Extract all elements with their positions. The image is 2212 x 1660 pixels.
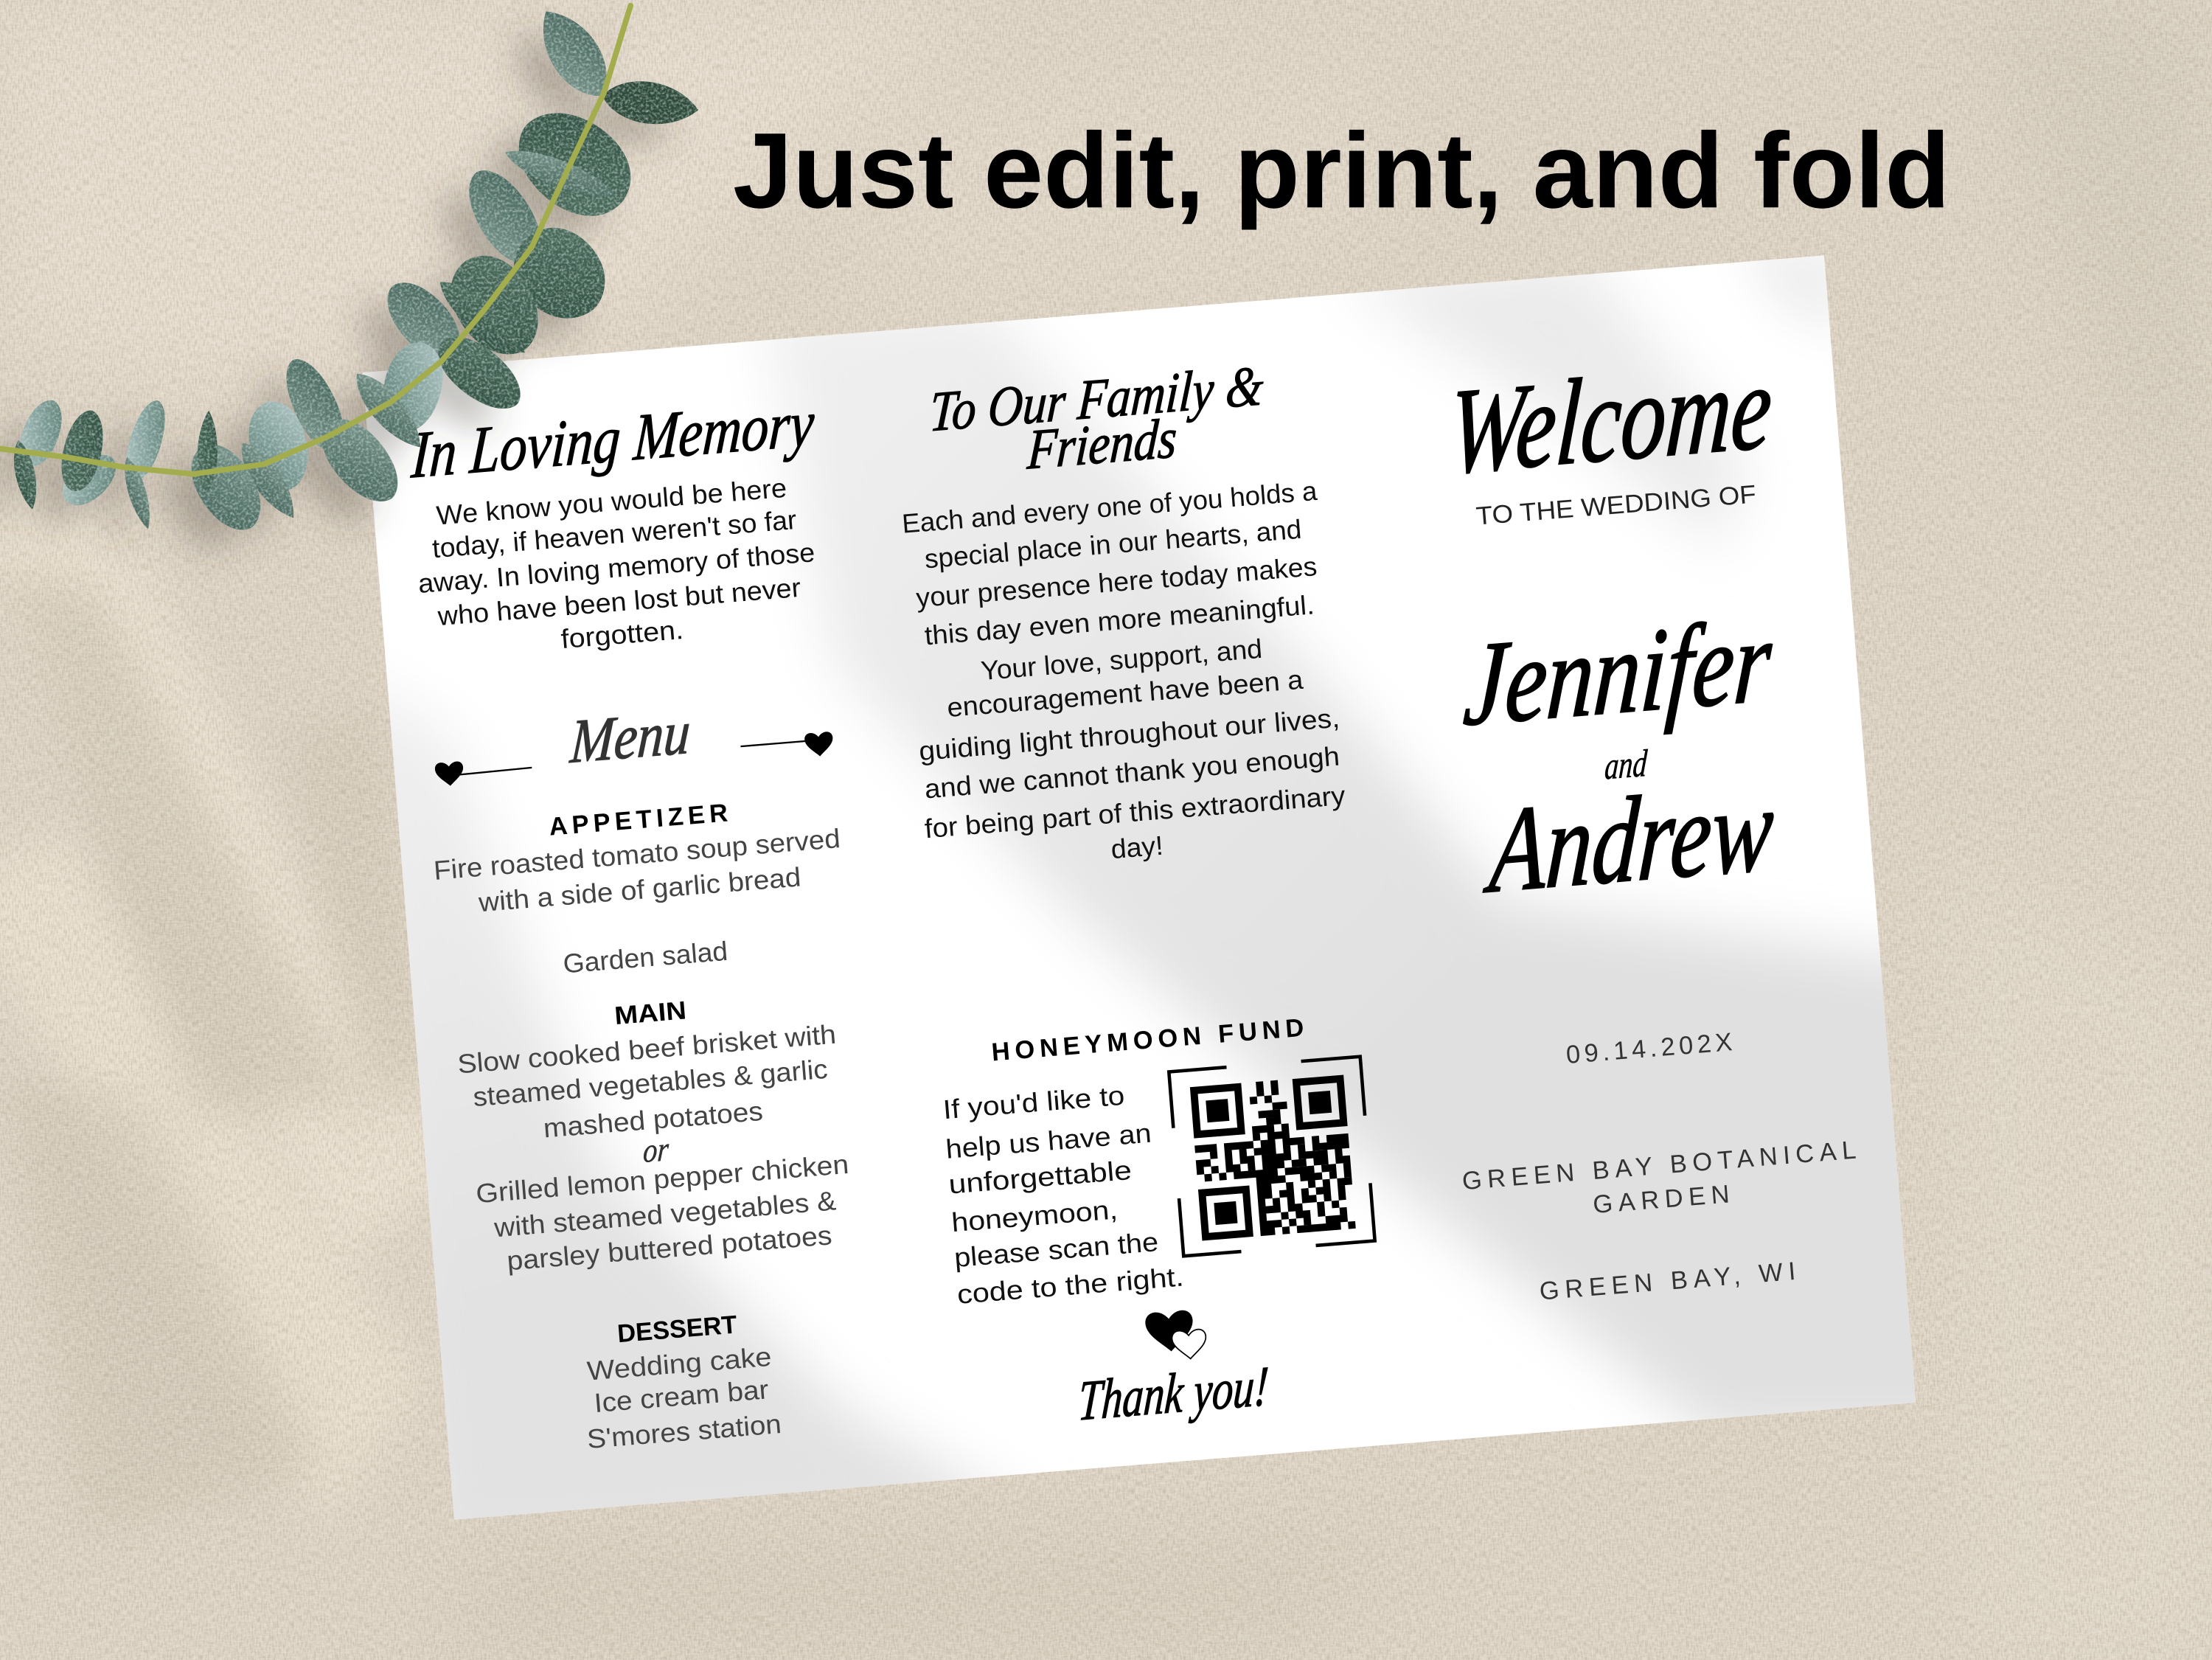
- thank-you message: special place in our hearts, and: [923, 514, 1303, 574]
- menu: appetizer: Fire roasted tomato soup served: [433, 823, 841, 886]
- couple names: Jennifer: [1461, 594, 1775, 751]
- panel: welcome cover: [1446, 338, 1857, 1306]
- couple names: Andrew: [1481, 760, 1777, 919]
- menu: dessert: Wedding cake: [586, 1341, 773, 1386]
- menu: main: mashed potatoes: [542, 1096, 764, 1143]
- menu: dessert: Ice cream bar: [593, 1374, 770, 1418]
- menu: dessert: S'mores station: [586, 1409, 782, 1454]
- menu: dessert: DESSERT: [616, 1310, 738, 1348]
- title: Just edit, print, and fold: [733, 110, 1950, 230]
- thank-you message: Your love, support, and: [980, 633, 1263, 686]
- leaves behind stem: [9, 0, 701, 542]
- menu: appetizer: APPETIZER: [548, 799, 729, 841]
- honeymoon text: unforgettable: [947, 1155, 1133, 1200]
- venue: GREEN BAY BOTANICAL: [1461, 1136, 1857, 1195]
- date: 09.14.202X: [1565, 1028, 1733, 1069]
- qr code: [1169, 1057, 1375, 1256]
- menu: main: [456, 996, 850, 1276]
- heading: menu: Menu: [568, 698, 692, 777]
- eucalyptus branch: [0, 0, 701, 542]
- honeymoon text: code to the right.: [956, 1261, 1185, 1310]
- venue: [1461, 1136, 1857, 1306]
- menu: appetizer: [433, 799, 841, 979]
- honeymoon text: [942, 1080, 1185, 1310]
- menu: appetizer: with a side of garlic bread: [477, 861, 802, 917]
- thank-you message: day!: [1110, 830, 1164, 864]
- honeymoon text: help us have an: [945, 1118, 1152, 1164]
- heading: welcome: Welcome: [1446, 338, 1775, 499]
- thank-you message: this day even more meaningful.: [923, 589, 1315, 650]
- thank-you message: encouragement have been a: [946, 664, 1304, 723]
- menu: main: Slow cooked beef brisket with: [456, 1019, 837, 1079]
- menu: main: with steamed vegetables &: [493, 1185, 837, 1243]
- heading: to our family and friends: To Our Family &: [928, 353, 1265, 443]
- thank-you message: for being part of this extraordinary: [923, 780, 1347, 844]
- menu: main: steamed vegetables & garlic: [472, 1054, 829, 1112]
- paper sheet: [363, 255, 1916, 1520]
- icon: right heart and line: [740, 732, 834, 757]
- thank-you message: Each and every one of you holds a: [901, 476, 1318, 539]
- memorial text: [417, 473, 816, 654]
- heading: to our family and friends: Friends: [1025, 406, 1179, 482]
- heading: to our family and friends: [928, 353, 1265, 482]
- icon: double hearts: [1144, 1310, 1208, 1360]
- menu: main: MAIN: [613, 996, 687, 1030]
- thank-you message: [901, 476, 1347, 864]
- thank you: Thank you!: [1077, 1354, 1270, 1433]
- honeymoon text: If you'd like to: [942, 1080, 1126, 1125]
- couple names: [1461, 594, 1777, 919]
- thank-you message: and we cannot thank you enough: [923, 741, 1340, 804]
- menu: main: Grilled lemon pepper chicken: [475, 1149, 850, 1209]
- venue: GREEN BAY, WI: [1538, 1257, 1797, 1306]
- panel: in loving memory and menu: [409, 386, 850, 1454]
- heading: honeymoon fund: HONEYMOON FUND: [990, 1014, 1305, 1066]
- subheading: TO THE WEDDING OF: [1475, 480, 1757, 531]
- thank-you message: guiding light throughout our lives,: [918, 703, 1340, 766]
- icon: left heart and line: [434, 761, 532, 787]
- heading: in loving memory: In Loving Memory: [409, 386, 817, 493]
- memorial text: We know you would be here: [435, 473, 787, 531]
- memorial text: away. In loving memory of those: [417, 537, 816, 599]
- menu: dessert: [586, 1310, 782, 1454]
- honeymoon text: please scan the: [953, 1226, 1159, 1273]
- panel: family message and honeymoon fund: [901, 353, 1375, 1433]
- memorial text: forgotten.: [560, 614, 684, 654]
- memorial text: today, if heaven weren't so far: [431, 504, 798, 563]
- thank-you message: your presence here today makes: [915, 551, 1318, 613]
- honeymoon text: honeymoon,: [950, 1194, 1119, 1237]
- menu: appetizer: Garden salad: [562, 936, 728, 979]
- menu: main: parsley buttered potatoes: [506, 1220, 833, 1276]
- couple names: and: [1604, 743, 1649, 788]
- memorial text: who have been lost but never: [436, 572, 802, 631]
- venue: GARDEN: [1592, 1180, 1731, 1219]
- menu: main: or: [642, 1130, 670, 1170]
- stem: [0, 6, 630, 474]
